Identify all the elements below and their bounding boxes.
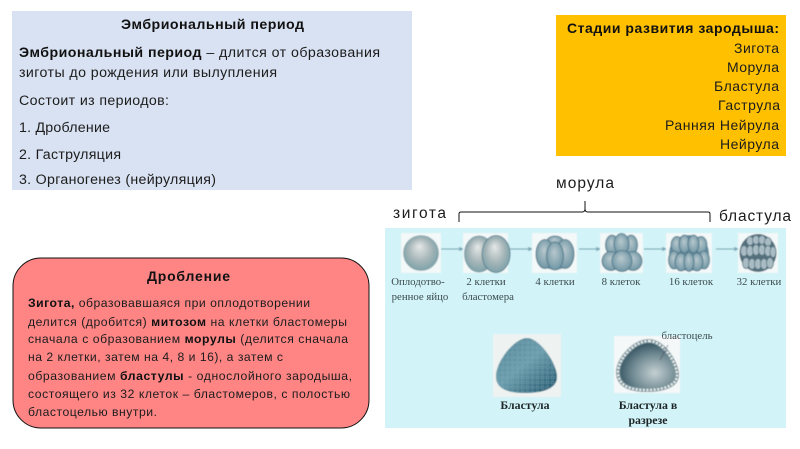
- text block: definition: [19, 45, 380, 81]
- text block: cleavage description: на 2 клетки, затем на 4, 8 и 16), а затем с: [28, 350, 283, 364]
- bracket: morula stages: [459, 201, 710, 222]
- text block: list of periods: 2. Гаструляция: [19, 147, 121, 163]
- text block: cleavage description: [28, 296, 352, 419]
- captions: cleavage stages: 2 клетки: [466, 276, 506, 288]
- arrow: [441, 248, 463, 250]
- arrow: [644, 248, 666, 250]
- text block: stages list: Гаструла: [718, 97, 780, 113]
- text block: list of periods: Состоит из периодов:: [19, 93, 169, 109]
- text block: cleavage description: состоящего из 32 клеток – бластомеров, с полостью: [28, 387, 350, 401]
- captions: cleavage stages: [391, 276, 782, 303]
- text block: cleavage description: бластоцелью внутри.: [28, 405, 157, 419]
- panel: development stages: [556, 15, 786, 156]
- text block: list of periods: [19, 93, 216, 188]
- text block: cleavage description: делится (дробится) митозом на клетки бластомеры: [28, 315, 347, 329]
- captions: blastula images: [500, 330, 713, 427]
- captions: cleavage stages: 16 клеток: [669, 276, 714, 288]
- text block: cleavage description: Зигота, образовавшаяся при оплодотворении: [28, 296, 310, 310]
- captions: blastula images: Бластула: [500, 398, 550, 412]
- text block: stages list: Нейрула: [720, 136, 779, 152]
- stage: 16 cells: [666, 233, 712, 273]
- text block: stages list: Зигота: [734, 40, 779, 56]
- panel: cleavage: [13, 258, 369, 428]
- diagram: cleavage sequence: [401, 233, 778, 397]
- text block: cleavage description: образованием бластулы - однослойного зародыша,: [28, 369, 352, 383]
- captions: cleavage stages: 8 клеток: [602, 276, 641, 288]
- captions: cleavage stages: ренное яйцо: [392, 291, 448, 303]
- captions: cleavage stages: 4 клетки: [535, 276, 575, 288]
- text block: definition: зиготы до рождения или вылупления: [19, 65, 277, 81]
- arrow: [716, 248, 738, 250]
- stage: fertilized egg: [401, 233, 441, 273]
- label: blastula: бластула: [719, 208, 791, 225]
- stage: 8 cells: [600, 233, 643, 273]
- panel: cleavage diagram: [385, 228, 786, 428]
- label: morula: морула: [556, 175, 614, 192]
- text block: definition: Эмбриональный период – длится от образования: [19, 45, 380, 61]
- stage: 2 cells: [463, 233, 510, 273]
- captions: cleavage stages: Оплодотво-: [391, 276, 445, 288]
- captions: cleavage stages: 32 клетки: [737, 276, 782, 288]
- arrow: [510, 248, 532, 250]
- text block: list of periods: 1. Дробление: [19, 120, 110, 136]
- captions: blastula images: Бластула в: [619, 398, 677, 412]
- text block: stages list: Морула: [727, 59, 779, 75]
- captions: blastula images: бластоцель: [661, 330, 713, 342]
- text block: stages list: [665, 40, 780, 152]
- heading: development stages: Стадии развития зародыша:: [567, 20, 779, 36]
- captions: cleavage stages: бластомера: [462, 291, 514, 303]
- text block: cleavage description: сначала с образованием морулы (делится сначала: [28, 332, 348, 346]
- stage: 32 cells: [738, 233, 778, 273]
- heading: embryonic period: Эмбриональный период: [121, 17, 304, 33]
- captions: blastula images: разрезе: [629, 413, 667, 427]
- panel: embryonic period: [12, 11, 412, 190]
- heading: cleavage: Дробление: [147, 268, 230, 284]
- arrow: [579, 248, 600, 250]
- label: zygote: зигота: [393, 205, 446, 222]
- text block: stages list: Бластула: [714, 78, 779, 94]
- text block: list of periods: 3. Органогенез (нейруляция): [19, 172, 216, 188]
- blastula image: [493, 334, 561, 397]
- text block: stages list: Ранняя Нейрула: [665, 117, 779, 133]
- blastula cross-section image: [614, 336, 680, 393]
- stage: 4 cells: [532, 233, 577, 273]
